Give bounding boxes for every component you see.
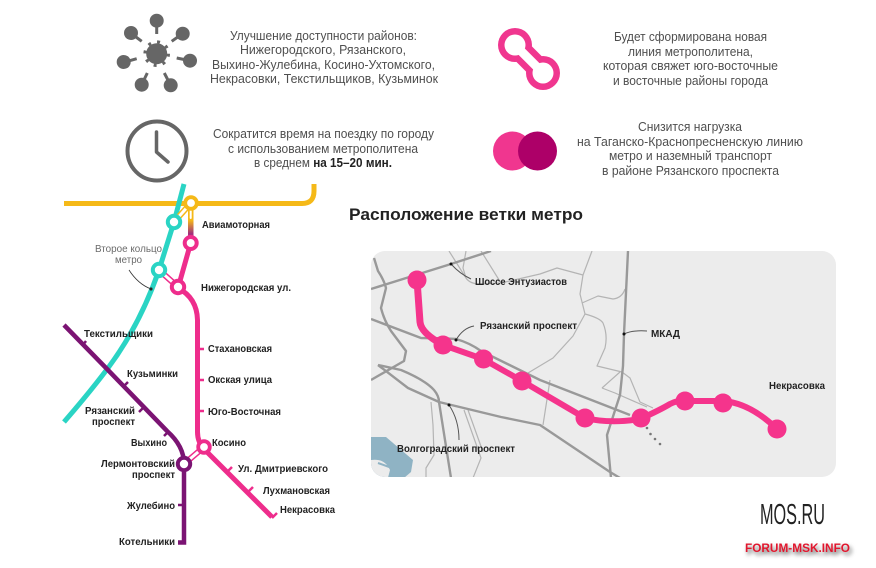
icon: new line link [498, 28, 560, 90]
text: district accessibility: Некрасовки, Текстильщиков, Кузьминок [210, 72, 439, 86]
map labels: МКАД [651, 328, 680, 340]
icon: districts hub [117, 14, 197, 92]
station labels: Кузьминки [127, 368, 178, 380]
station labels: Жулебино [126, 500, 175, 512]
map labels: Шоссе Энтузиастов [475, 276, 567, 288]
text: new metro line: которая свяжет юго-восточные [603, 59, 778, 73]
text: travel time: Сократится время на поездку по городу [213, 127, 435, 141]
transfer links [159, 203, 204, 464]
callout leader: second ring [129, 270, 152, 290]
station labels: проспект [92, 416, 135, 428]
station labels: Юго-Восточная [208, 406, 281, 418]
text: district accessibility [210, 29, 439, 86]
text: travel time [213, 127, 435, 170]
text: reduced load: на Таганско-Краснопресненскую линию [577, 135, 803, 149]
watermark: FORUM-MSK.INFO [745, 543, 850, 555]
line: purple ticks [83, 341, 184, 505]
station labels: проспект [132, 469, 175, 481]
text: travel time: с использованием метрополитена [228, 142, 418, 156]
map labels: Волгоградский проспект [397, 443, 515, 455]
station labels: Рязанский [85, 405, 135, 417]
station labels: Выхино [131, 437, 167, 449]
callout: second ring: метро [115, 254, 142, 266]
logo: MOS.RU: MOS.RU [760, 499, 825, 531]
station labels: Нижегородская ул. [201, 282, 291, 294]
text: new metro line: и восточные районы города [613, 74, 768, 88]
line: gradient segment [188, 205, 194, 243]
map labels: Некрасовка [769, 380, 825, 392]
station: Nizhegorodskaya teal [153, 264, 165, 276]
icon: clock [128, 122, 186, 180]
station: Nizhegorodskaya pink [172, 281, 184, 293]
callout: second ring: Второе кольцо [95, 243, 162, 255]
line: teal second ring [64, 184, 184, 422]
text: district accessibility: Нижегородского, Рязанского, [240, 43, 406, 57]
panel: map [371, 251, 836, 478]
station labels: Текстильщики [84, 328, 153, 340]
station labels: Окская улица [208, 374, 272, 386]
map background [371, 251, 836, 477]
line: pink [178, 243, 272, 517]
station labels: Лухмановская [263, 485, 330, 497]
line: purple [64, 325, 184, 542]
station: Aviamotornaya yellow [185, 197, 197, 209]
line: yellow [64, 184, 314, 204]
map leaders [448, 262, 647, 440]
icon: overlapping circles [493, 132, 557, 170]
station labels [84, 219, 335, 548]
station: Aviamotornaya teal [168, 216, 180, 228]
text: reduced load [577, 120, 803, 178]
route: new metro line [408, 270, 786, 438]
map labels [397, 276, 825, 455]
station labels: Авиамоторная [202, 219, 270, 231]
text: reduced load: метро и наземный транспорт [609, 149, 772, 163]
map roads and water [371, 251, 661, 478]
text: new metro line: Будет сформирована новая [614, 30, 767, 44]
text: district accessibility: Улучшение доступности районов: [230, 29, 417, 43]
callout: second ring [95, 243, 162, 266]
text: reduced load: в районе Рязанского проспекта [602, 164, 779, 178]
station: Kosino [198, 441, 210, 453]
map labels: Рязанский проспект [480, 320, 577, 332]
station labels: Ул. Дмитриевского [238, 463, 328, 475]
station: Aviamotornaya pink [185, 237, 197, 249]
station: Lermontovsky [178, 458, 190, 470]
text: district accessibility: Выхино-Жулебина, Косино-Ухтомского, [212, 58, 435, 72]
metro scheme [64, 184, 335, 548]
station labels: Косино [212, 437, 246, 449]
text: travel time: в среднем на 15–20 мин. [254, 156, 392, 170]
heading: line location: Расположение ветки метро [349, 206, 583, 224]
text: reduced load: Снизится нагрузка [638, 120, 742, 134]
text: new metro line [603, 30, 778, 88]
line: pink ticks [197, 349, 277, 518]
station labels: Котельники [119, 536, 175, 548]
station labels: Некрасовка [280, 504, 335, 516]
station labels: Лермонтовский [101, 458, 175, 470]
text: new metro line: линия метрополитена, [628, 45, 753, 59]
station labels: Стахановская [208, 343, 272, 355]
